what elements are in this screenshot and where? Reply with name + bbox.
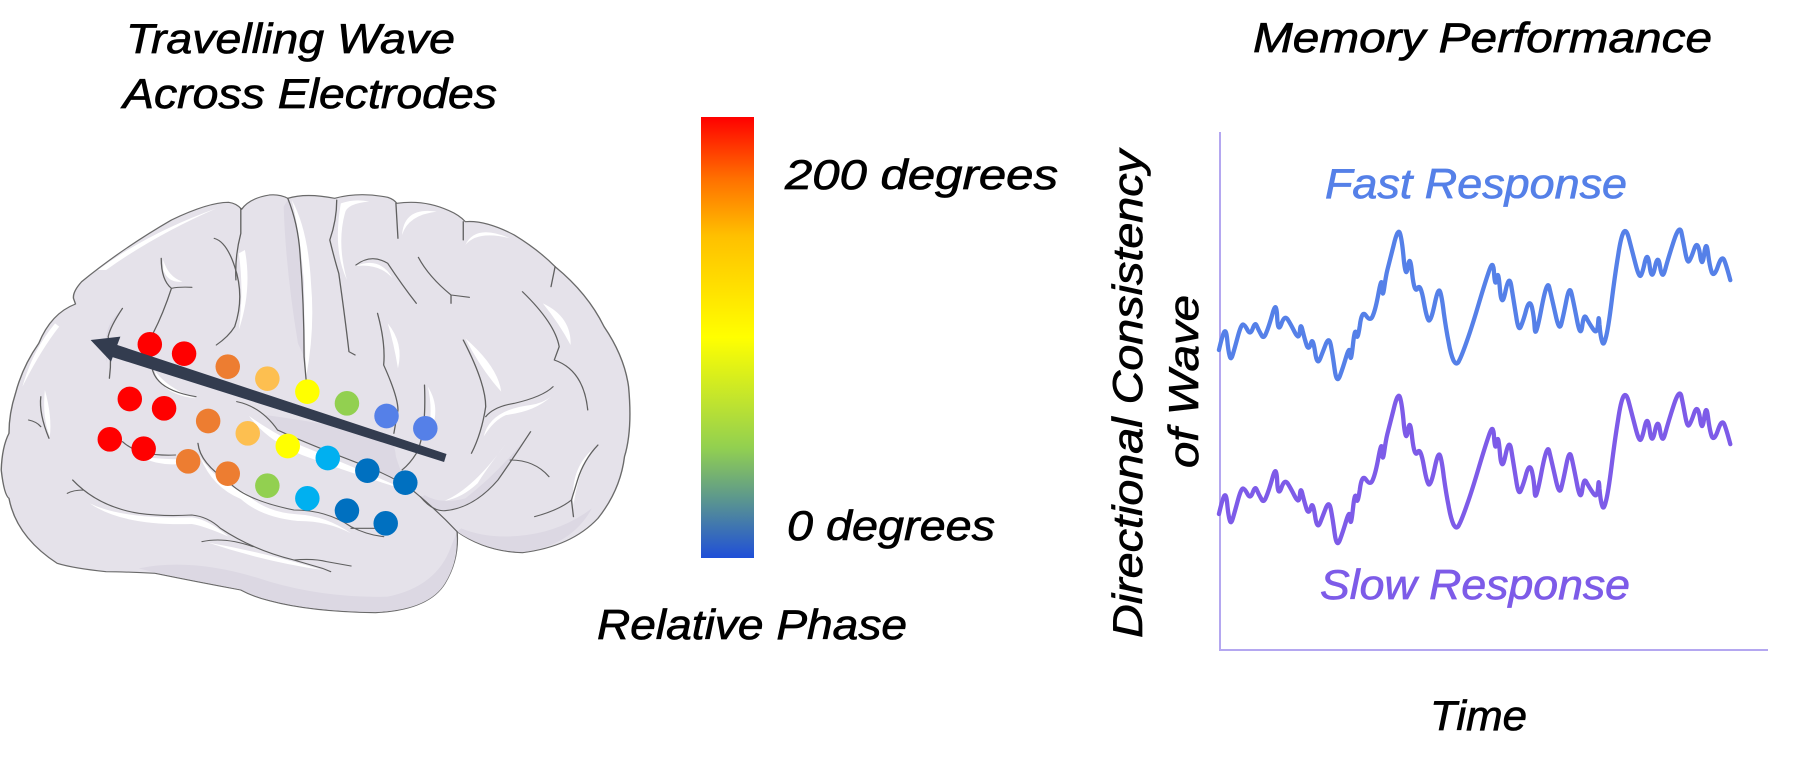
brain highlights: [22, 200, 592, 570]
title: travelling wave across electrodes: Travelling Wave: [126, 15, 455, 62]
electrodes: middle row: [118, 387, 418, 495]
x axis label: time: Time: [1430, 692, 1527, 739]
brain with electrodes and wave arrow: [1, 195, 630, 613]
label: 0 degrees: 0 degrees: [787, 502, 995, 549]
electrodes: top row: [138, 332, 438, 441]
label: 200 degrees: 200 degrees: [784, 151, 1058, 198]
arrow: wave direction: [91, 337, 447, 462]
label: fast response: Fast Response: [1325, 160, 1627, 207]
brain sulci: [29, 198, 598, 572]
brain shading: [105, 200, 592, 612]
label: relative phase: Relative Phase: [597, 601, 907, 648]
label: slow response: Slow Response: [1320, 561, 1630, 608]
chart axes: [1220, 132, 1768, 650]
y axis label: Directional Consistency: [1104, 147, 1151, 638]
title: travelling wave across electrodes: [120, 15, 497, 117]
y axis label: [1104, 147, 1207, 638]
title: memory performance: Memory Performance: [1253, 14, 1712, 61]
electrodes: bottom row: [98, 427, 398, 536]
colour bar: relative phase: [701, 117, 754, 558]
trace: slow response: [1219, 394, 1730, 543]
title: travelling wave across electrodes: Across Electrodes: [120, 70, 497, 117]
trace: fast response: [1219, 230, 1730, 379]
y axis label: of Wave: [1160, 295, 1207, 468]
brain outline: [1, 195, 630, 613]
